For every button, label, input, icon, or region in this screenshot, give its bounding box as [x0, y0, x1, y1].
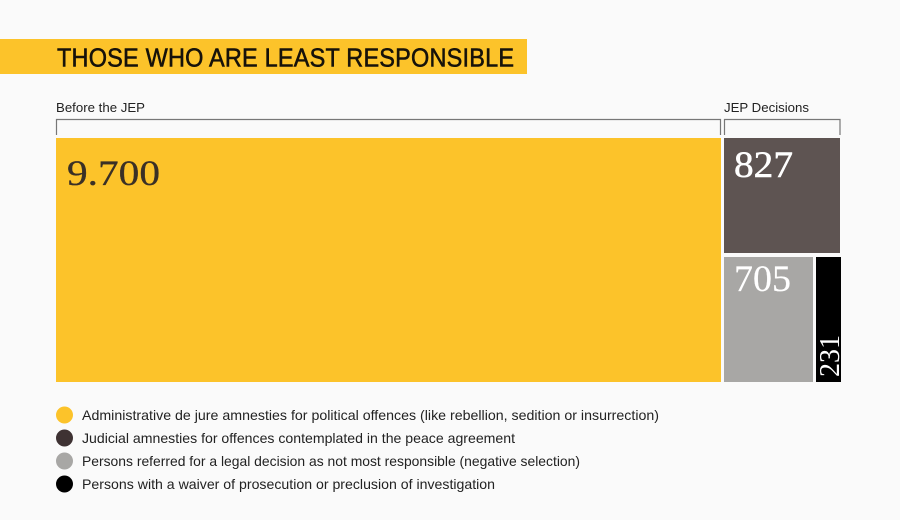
legend item: judicial amnesties: Judicial amnesties for offences contemplated in the peace agreement [82, 430, 515, 446]
title: THOSE WHO ARE LEAST RESPONSIBLE [57, 45, 514, 73]
label: JEP decisions: JEP Decisions [724, 100, 810, 115]
legend item: administrative amnesties: Administrative de jure amnesties for political offences (like rebellion, sedition or insurrection) [82, 407, 659, 423]
block: 705 referred persons: 705 [734, 259, 791, 300]
block: 705 referred persons [724, 257, 813, 382]
block: 231 waiver of prosecution [814, 257, 846, 382]
legend item: waiver of prosecution: Persons with a waiver of prosecution or preclusion of investigation [82, 476, 495, 492]
block: 827 judicial amnesties [724, 138, 840, 253]
legend [56, 406, 659, 492]
bracket: JEP decisions [724, 120, 840, 135]
legend item: referred persons: Persons referred for a legal decision as not most responsible (negative selection) [82, 453, 580, 469]
label: before the JEP: Before the JEP [56, 100, 145, 115]
block: 231 waiver of prosecution: 231 [814, 335, 846, 377]
block: 827 judicial amnesties: 827 [734, 145, 793, 186]
block: 9.700 administrative amnesties: 9.700 [67, 153, 160, 193]
bracket: before the JEP [56, 120, 720, 135]
